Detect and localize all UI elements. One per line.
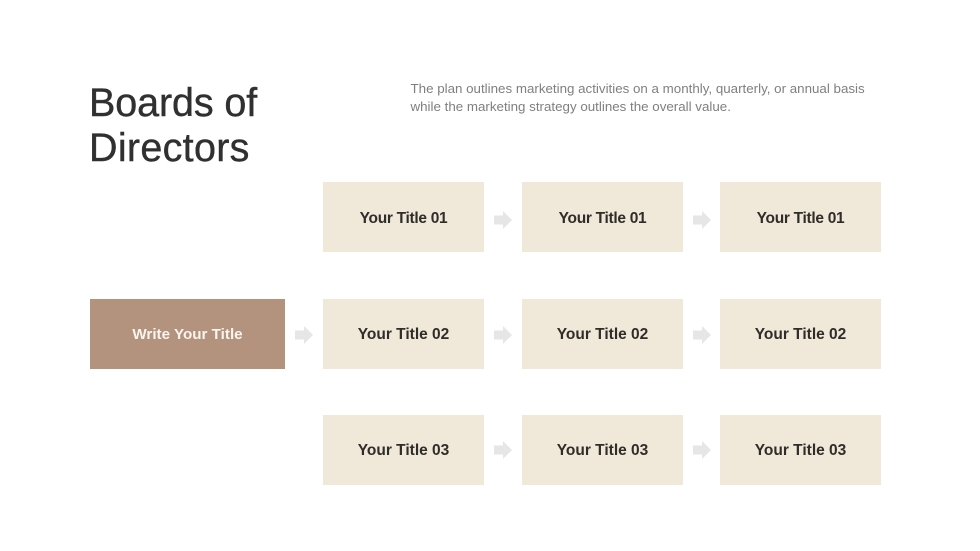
row 1 box 3 [720,182,881,252]
row 1 box 3: Your Title 01 [757,210,844,227]
arrow: root to row 2 [295,326,313,344]
row 2 box 3 [720,299,881,369]
description text: The plan outlines marketing activities on a monthly, quarterly, or annual basis [410,80,865,96]
root box: Write Your Title [132,326,243,343]
row 3 box 2 [522,415,683,485]
arrow: row 1 first [494,211,512,229]
title: Boards of [89,81,257,125]
row 1 box 2 [522,182,683,252]
row 2 box 3: Your Title 02 [755,326,846,343]
row 3 box 3: Your Title 03 [755,442,846,459]
row 2 box 2 [522,299,683,369]
title: Directors [89,126,250,170]
row 2 box 1 [323,299,484,369]
arrow: row 1 second [693,211,711,229]
root box [90,299,285,369]
description text [410,80,865,114]
arrow: row 3 second [693,441,711,459]
row 3 box 1 [323,415,484,485]
row 2 box 1: Your Title 02 [358,326,449,343]
row 1 box 1 [323,182,484,252]
arrow: row 2 first [494,326,512,344]
row 2 box 2: Your Title 02 [557,326,648,343]
row 3 box 1: Your Title 03 [358,442,449,459]
title [89,81,258,170]
row 3 box 2: Your Title 03 [557,442,648,459]
description text: while the marketing strategy outlines the overall value. [410,98,731,114]
row 3 box 3 [720,415,881,485]
arrow: row 2 second [693,326,711,344]
row 1 box 1: Your Title 01 [360,210,447,227]
arrow: row 3 first [494,441,512,459]
row 1 box 2: Your Title 01 [559,210,646,227]
